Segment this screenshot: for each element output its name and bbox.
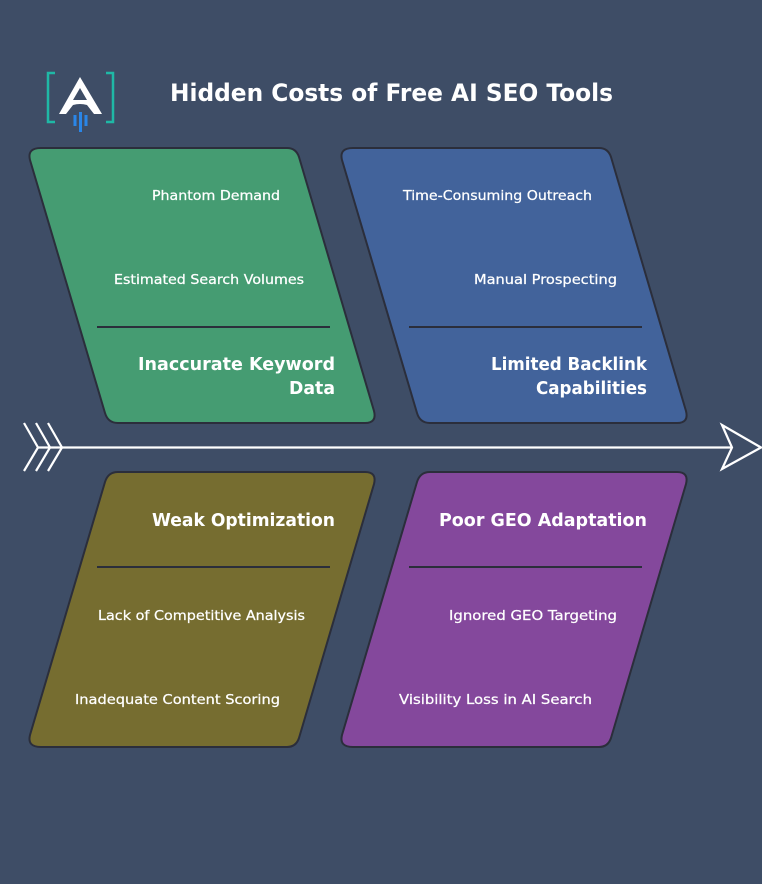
heading: limited backlink capabilities [491,354,648,399]
label: inadequate content scoring: Inadequate Content Scoring [75,692,280,708]
label: manual prospecting: Manual Prospecting [474,272,617,288]
heading: limited backlink capabilities: Capabilities [536,378,647,399]
heading: inaccurate keyword data: Inaccurate Keyword [138,354,335,375]
panel: inaccurate keyword data [29,148,375,423]
logo [48,73,113,132]
panel: weak optimization [29,472,375,747]
heading: inaccurate keyword data [138,354,335,399]
spine arrow [24,423,761,471]
title: Hidden Costs of Free AI SEO Tools [170,79,613,107]
label: estimated search volumes: Estimated Search Volumes [114,272,304,288]
heading: limited backlink capabilities: Limited Backlink [491,354,648,375]
label: phantom demand: Phantom Demand [152,188,280,204]
label: lack of competitive analysis: Lack of Competitive Analysis [98,608,305,624]
label: visibility loss in ai search: Visibility Loss in AI Search [399,692,592,708]
panel: poor geo adaptation [341,472,687,747]
heading: weak optimization: Weak Optimization [152,510,335,531]
label: ignored geo targeting: Ignored GEO Targeting [449,608,617,624]
heading: inaccurate keyword data: Data [289,378,335,399]
label: time-consuming outreach: Time-Consuming Outreach [402,188,592,204]
heading: poor geo adaptation: Poor GEO Adaptation [439,510,647,531]
panel: limited backlink capabilities [341,148,687,423]
